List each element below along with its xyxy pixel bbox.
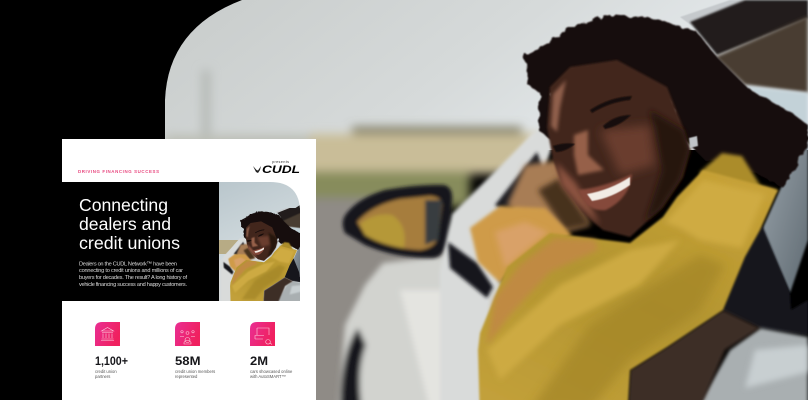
intro paragraph [79, 262, 187, 288]
caption: credit union [95, 369, 117, 374]
CUDL logo: CUDL [262, 164, 300, 176]
intro paragraph: Dealers on the CUDL Network™ have been [79, 262, 177, 268]
intro paragraph: vehicle financing success and happy customers. [79, 282, 187, 288]
caption: credit union members [175, 369, 215, 374]
stat: credit union members [175, 322, 215, 379]
headline: dealers and [79, 214, 171, 234]
eyebrow label: DRIVING FINANCING SUCCESS [78, 169, 159, 174]
number: 2M [250, 354, 268, 368]
intro paragraph: buyers for decades. The result? A long history of [79, 275, 187, 281]
caption: cars showcased online [250, 369, 293, 374]
CUDL logo: presents [272, 160, 289, 164]
caption [250, 369, 293, 379]
stat: cars showcased [250, 322, 293, 379]
caption: with AutoSMART™ [250, 374, 286, 379]
woman in yellow jacket [440, 0, 808, 400]
stat: credit union partners [95, 322, 128, 379]
headline [79, 195, 180, 253]
headline: Connecting [79, 195, 168, 215]
infographic card [62, 139, 316, 400]
wing mirror [343, 185, 452, 258]
number: 58M [175, 354, 201, 368]
hero photo: woman leaning out of a car [165, 0, 808, 400]
headline: credit unions [79, 233, 180, 253]
intro paragraph: connecting to credit unions and millions of car [79, 268, 183, 274]
CUDL logo [253, 160, 300, 176]
caption: partners [95, 374, 110, 379]
icon: bank [95, 322, 120, 346]
icon: search on screen [250, 322, 275, 346]
small card photo [219, 182, 304, 302]
sky [165, 0, 808, 150]
caption [95, 369, 117, 379]
icon: people [175, 322, 200, 346]
black hero panel [62, 182, 219, 301]
caption [175, 369, 215, 379]
blurred background landscape [165, 70, 540, 400]
blurred car body [338, 132, 545, 400]
card background [62, 139, 316, 400]
caption: represented [175, 374, 198, 379]
number: 1,100+ [95, 354, 128, 368]
